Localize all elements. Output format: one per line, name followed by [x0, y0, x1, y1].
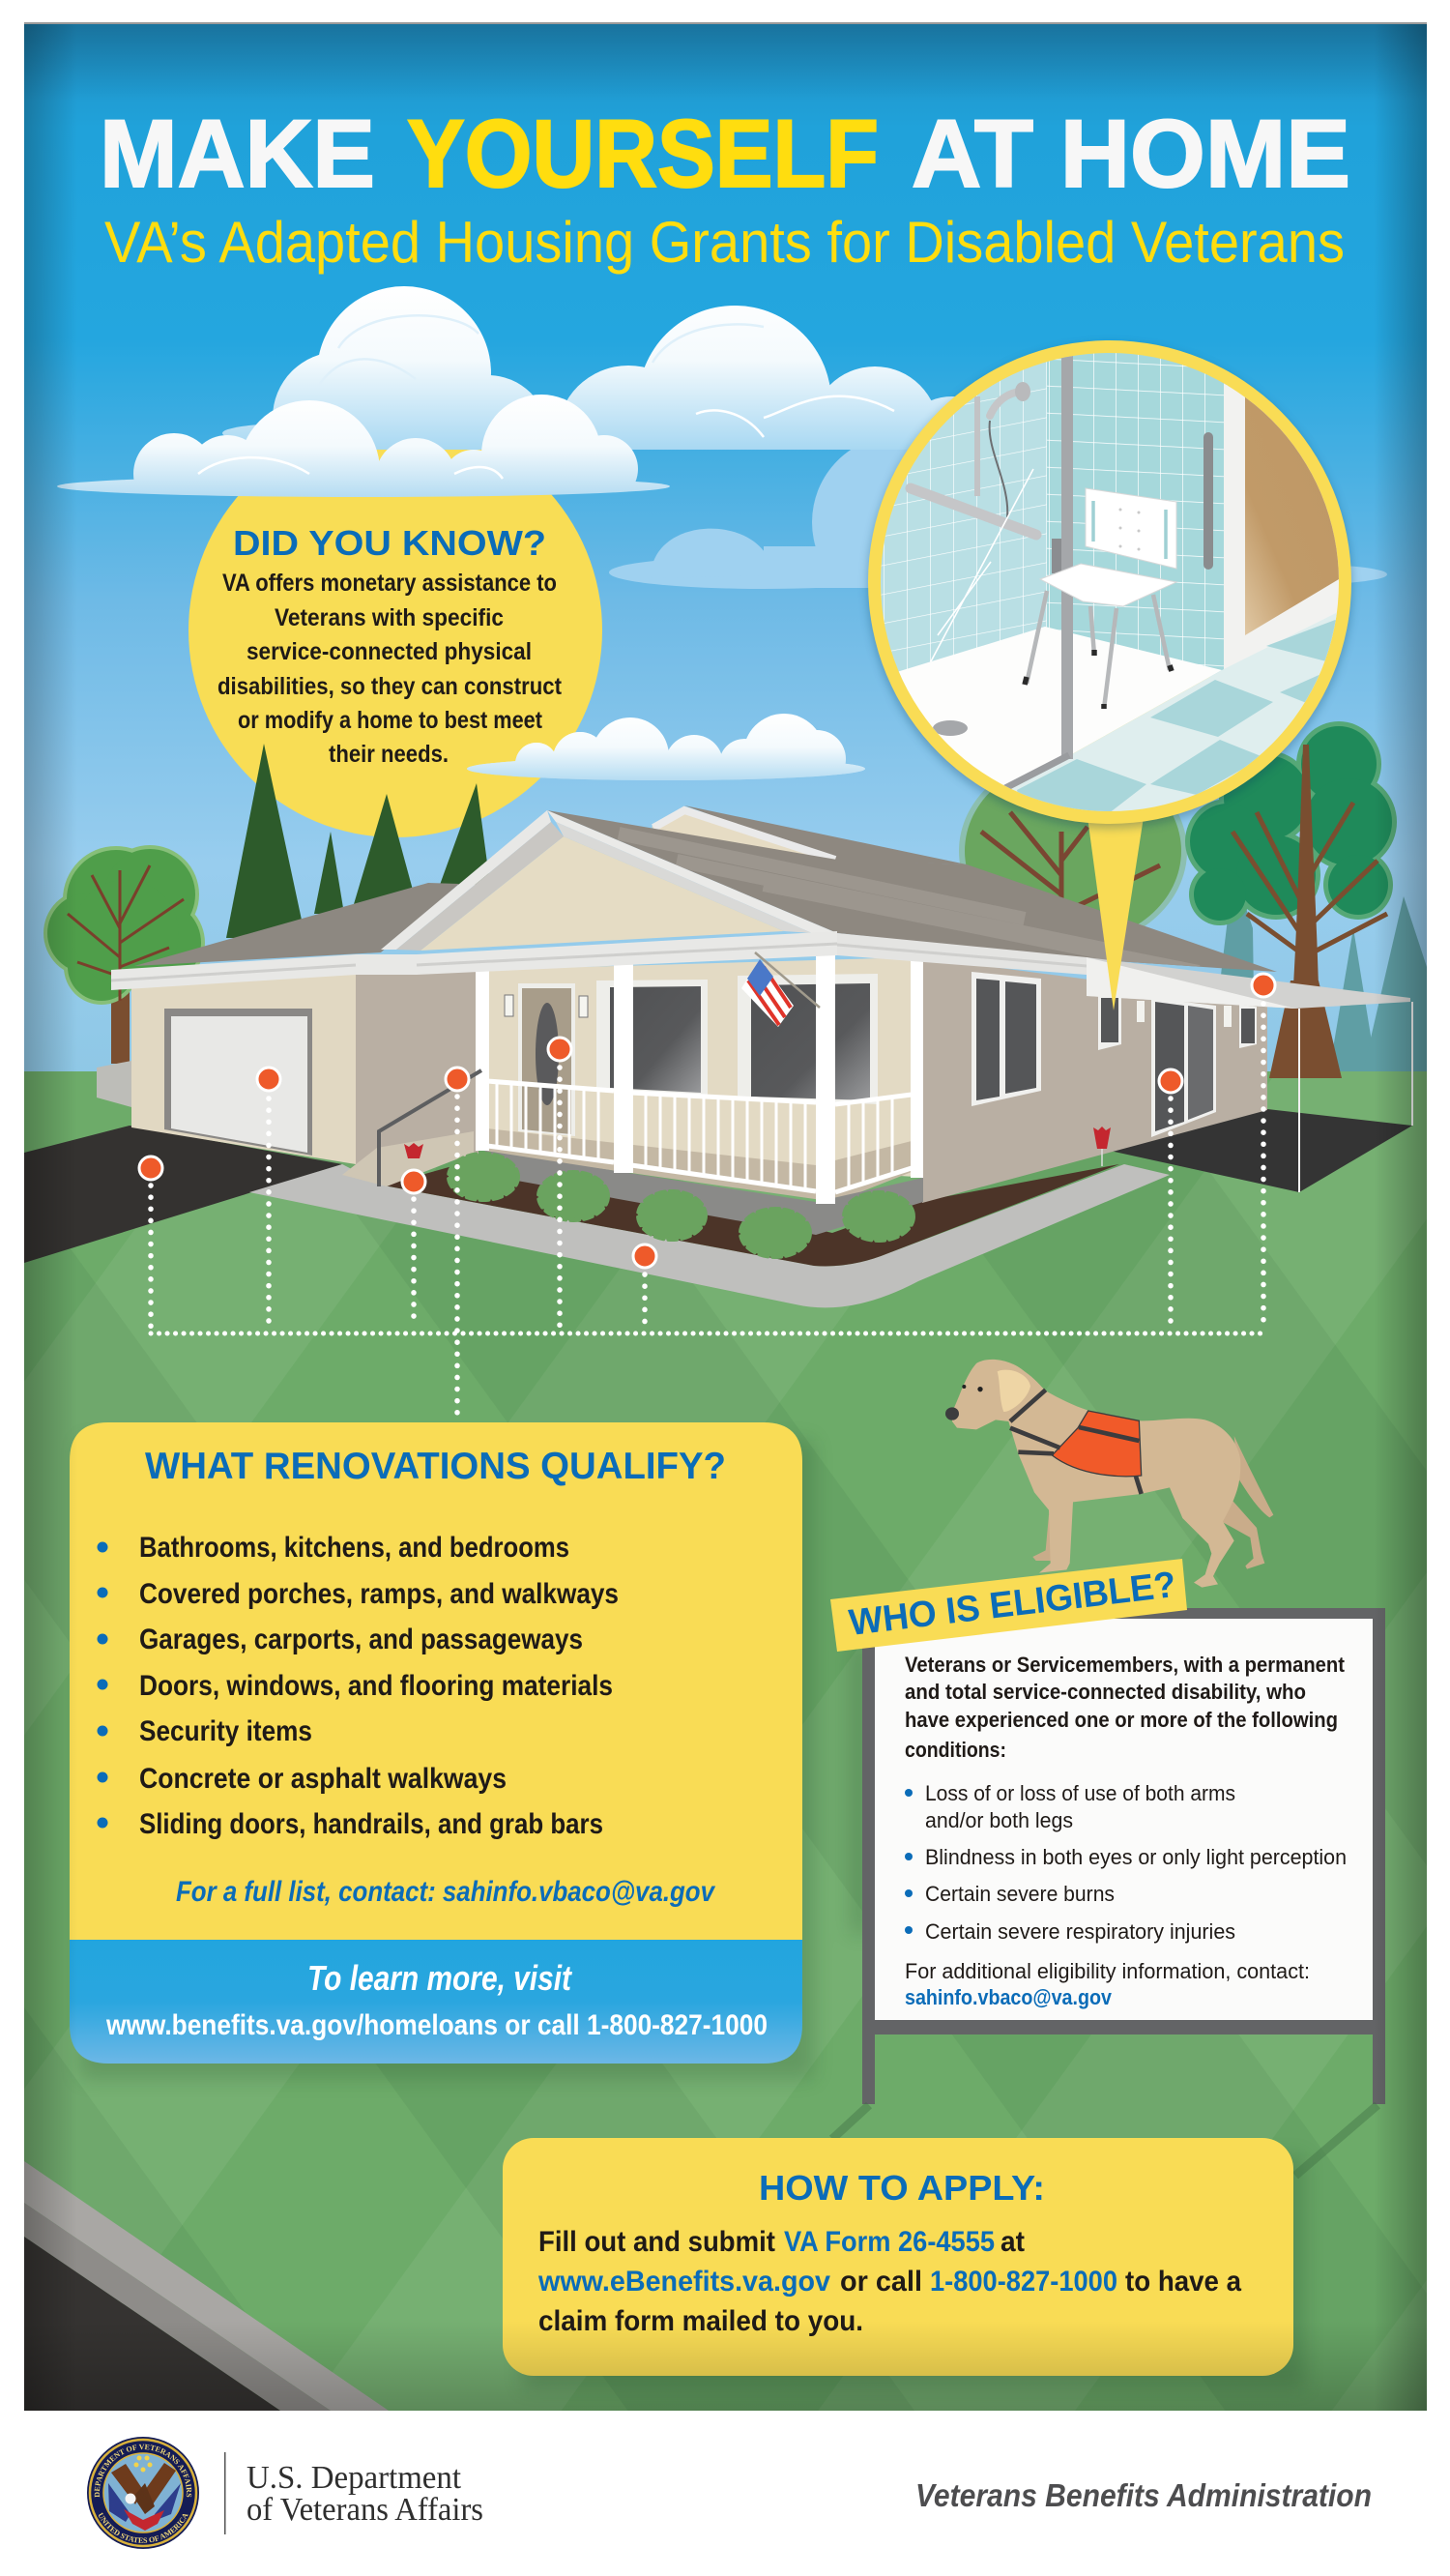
drain — [933, 720, 968, 736]
title: AT HOME — [912, 100, 1350, 207]
additional contact — [905, 1959, 1310, 2009]
grab bars — [911, 437, 1208, 565]
VA seal — [87, 2437, 199, 2549]
shower chair — [1025, 488, 1176, 709]
department name: U.S. Department — [246, 2460, 462, 2496]
did you know text: DID YOU KNOW? — [233, 523, 546, 563]
shrubs — [449, 1154, 914, 1257]
shower floor — [875, 627, 1222, 793]
sliding door — [1151, 998, 1216, 1137]
fascia trim — [111, 931, 1087, 990]
intro text: Veterans or Servicemembers, with a permanent — [905, 1653, 1345, 1677]
heading: WHAT RENOVATIONS QUALIFY? — [145, 1446, 726, 1487]
banner: WHO IS ELIGIBLE? — [847, 1565, 1178, 1644]
flag — [741, 952, 820, 1027]
right tile wall — [1047, 338, 1231, 677]
footer — [87, 2437, 1372, 2549]
tree: round back right — [959, 789, 1187, 926]
foundation — [485, 1151, 923, 1235]
body text: www.eBenefits.va.gov — [537, 2266, 830, 2298]
porch floor — [487, 1128, 912, 1202]
contact line: For a full list, contact: sahinfo.vbaco@va.gov — [176, 1876, 716, 1908]
marker pins — [139, 974, 1275, 1268]
bullet list: Sliding doors, handrails, and grab bars — [139, 1808, 603, 1840]
porch railing — [487, 1081, 912, 1192]
garage wall — [131, 965, 356, 1164]
cloud upper — [222, 286, 955, 450]
small window 2 — [1239, 1005, 1257, 1048]
back gable — [652, 805, 967, 864]
front door — [505, 983, 588, 1136]
porch columns — [476, 952, 923, 1204]
garage roof — [134, 883, 459, 966]
carport roof — [1087, 957, 1410, 1009]
intro text: and total service-connected disability, who — [905, 1680, 1306, 1704]
panel: what renovations qualify — [70, 1422, 802, 2064]
subtitle: VA’s Adapted Housing Grants for Disabled Veterans — [104, 210, 1345, 275]
garage door — [164, 1009, 312, 1156]
grass lawn — [24, 1071, 1427, 2412]
department name — [246, 2460, 483, 2528]
background cloud — [609, 435, 1387, 609]
body text: Fill out and submit — [538, 2226, 775, 2258]
body text: at — [1000, 2226, 1025, 2258]
body text: 1-800-827-1000 — [930, 2266, 1117, 2298]
sky — [24, 23, 1427, 1077]
glass door post — [1005, 353, 1073, 788]
frame top line — [24, 22, 1427, 24]
title: MAKE — [100, 100, 375, 207]
cloud small — [467, 714, 865, 780]
bullet list: Security items — [139, 1715, 312, 1747]
did you know text: their needs. — [329, 741, 449, 768]
bullet list: Garages, carports, and passageways — [139, 1624, 583, 1655]
title: YOURSELF — [407, 100, 879, 207]
driveway — [24, 1126, 342, 1263]
department name: of Veterans Affairs — [246, 2492, 483, 2528]
additional contact: For additional eligibility information, contact: — [905, 1959, 1310, 1983]
porch back wall — [483, 957, 915, 1177]
sign post shadows — [832, 2105, 1378, 2176]
body text — [537, 2226, 1241, 2337]
panel: how to apply — [503, 2138, 1293, 2376]
did you know text: service-connected physical — [246, 638, 532, 665]
callout tail — [1088, 817, 1144, 1010]
conditions list: Blindness in both eyes or only light perception — [925, 1845, 1347, 1869]
tree: big right — [1185, 721, 1397, 1078]
bullet list: Doors, windows, and flooring materials — [139, 1670, 613, 1702]
soft panel shadows — [79, 1441, 1305, 2388]
front gable — [381, 810, 837, 951]
left tile wall — [870, 338, 1049, 687]
conditions list — [905, 1781, 1347, 1944]
tulip left — [404, 1143, 423, 1158]
bullet list: Concrete or asphalt walkways — [139, 1763, 507, 1795]
carport posts — [1299, 1002, 1412, 1192]
side window — [972, 972, 1041, 1106]
road corner — [24, 2161, 389, 2411]
background teal trees — [1221, 896, 1427, 1071]
small cloud overlap — [467, 732, 865, 786]
did you know text: disabilities, so they can construct — [218, 673, 563, 700]
checker floor — [996, 604, 1353, 832]
mulch bed — [384, 1156, 1119, 1266]
right wall — [918, 957, 1267, 1203]
conditions list: and/or both legs — [925, 1808, 1073, 1832]
porch window left — [596, 980, 708, 1098]
conditions list: Certain severe burns — [925, 1882, 1115, 1906]
cloud lower — [57, 395, 670, 497]
carport slab — [1101, 1109, 1412, 1192]
body text: or call — [840, 2266, 922, 2298]
ramp and handrail — [342, 1070, 481, 1186]
bathroom scene — [870, 338, 1369, 832]
learn more: To learn more, visit — [307, 1958, 573, 1998]
tulip right — [1093, 1127, 1111, 1166]
bullet list: Covered porches, ramps, and walkways — [139, 1578, 619, 1610]
sign frame — [862, 1608, 1385, 2104]
pine trees — [226, 744, 490, 938]
intro text: conditions: — [905, 1738, 1006, 1762]
heading: HOW TO APPLY: — [759, 2168, 1045, 2208]
administration name: Veterans Benefits Administration — [915, 2477, 1372, 2513]
AC unit — [97, 1061, 131, 1107]
did you know text: VA offers monetary assistance to — [222, 570, 557, 597]
body text: claim form mailed to you. — [538, 2305, 863, 2337]
panel: who is eligible sign — [830, 1559, 1385, 2104]
brown wall — [1224, 338, 1369, 725]
conditions list: Loss of or loss of use of both arms — [925, 1781, 1235, 1805]
shower head and hose — [977, 382, 1030, 517]
dog vest — [1052, 1411, 1142, 1477]
glass streaks — [931, 469, 1033, 661]
did you know text — [218, 523, 563, 768]
porch window right — [738, 974, 878, 1104]
dog — [945, 1360, 1273, 1588]
conditions list: Certain severe respiratory injuries — [925, 1919, 1235, 1944]
website and phone: www.benefits.va.gov/homeloans or call 1-800-827-1000 — [105, 2009, 768, 2041]
small window — [1098, 994, 1121, 1050]
main roof — [547, 810, 1277, 972]
walkway — [249, 1164, 1170, 1307]
bullet list — [97, 1532, 619, 1840]
VA seal: UNITED STATES OF AMERICA — [99, 2512, 188, 2543]
intro text: have experienced one or more of the following — [905, 1708, 1338, 1732]
body text: VA Form 26-4555 — [784, 2226, 995, 2258]
tree: left — [44, 845, 205, 1064]
bathroom callout bubble — [868, 338, 1369, 832]
additional contact: sahinfo.vbaco@va.gov — [905, 1985, 1112, 2009]
bullet list: Bathrooms, kitchens, and bedrooms — [139, 1532, 569, 1564]
garage side wall — [356, 967, 478, 1164]
did you know text: or modify a home to best meet — [238, 707, 543, 734]
dotted connector lines — [151, 1004, 1263, 1417]
VA seal: DEPARTMENT OF VETERANS AFFAIRS — [95, 2444, 191, 2498]
did you know text: Veterans with specific — [275, 604, 504, 631]
intro text — [905, 1653, 1345, 1762]
house — [111, 805, 1412, 1257]
title — [100, 100, 1350, 207]
did you know circle — [188, 424, 602, 837]
body text: to have a — [1125, 2266, 1241, 2298]
